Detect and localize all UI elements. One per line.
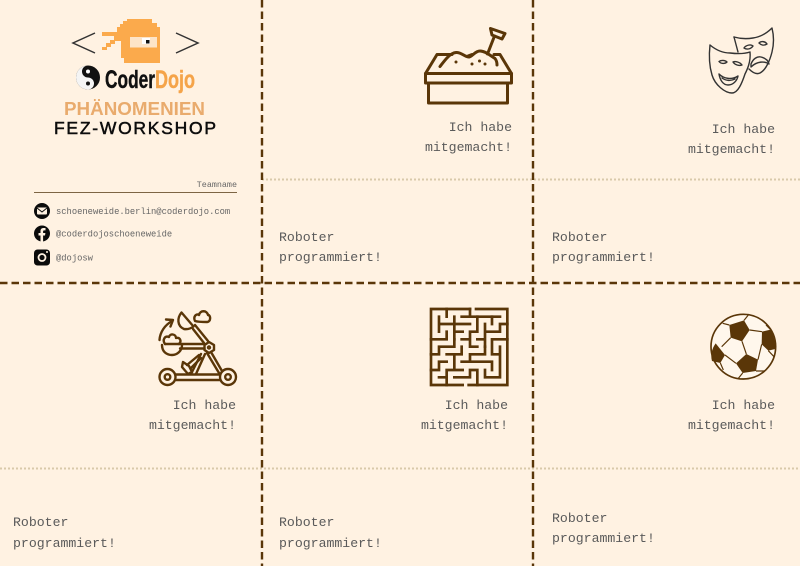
text: Ich habe mitgemacht, catapult — [149, 398, 236, 433]
text: Ich habe mitgemacht, sandbox: mitgemacht! — [425, 140, 512, 155]
contact: instagram — [34, 250, 94, 266]
heading: Phänomenien: PHÄNOMENIEN — [64, 99, 205, 119]
text: Roboter programmiert, row 1 column 2 — [279, 230, 382, 265]
text: Roboter programmiert, row 1 column 2: Roboter — [279, 230, 334, 245]
text: Roboter programmiert, row 2 column 2 — [279, 515, 382, 551]
text: Roboter programmiert, row 1 column 3 — [552, 230, 655, 265]
text: Ich habe mitgemacht, catapult: mitgemacht! — [149, 418, 236, 433]
icon: sandbox — [426, 28, 512, 103]
text: Roboter programmiert, row 1 column 2: programmiert! — [279, 250, 382, 265]
text: Ich habe mitgemacht, soccer ball: Ich habe — [712, 398, 775, 413]
text: Roboter programmiert, row 2 column 2: programmiert! — [279, 536, 382, 551]
icon: catapult — [160, 311, 236, 385]
text: Roboter programmiert, row 2 column 1 — [13, 515, 116, 551]
text: Ich habe mitgemacht, catapult: Ich habe — [173, 398, 236, 413]
text: Ich habe mitgemacht, sandbox — [425, 120, 512, 155]
text: Roboter programmiert, row 1 column 3: Roboter — [552, 230, 607, 245]
text: Ich habe mitgemacht, maze: mitgemacht! — [421, 418, 508, 433]
text: Ich habe mitgemacht, masks: mitgemacht! — [688, 142, 775, 157]
text: Roboter programmiert, row 1 column 3: programmiert! — [552, 250, 655, 265]
text: Ich habe mitgemacht, soccer ball — [688, 398, 775, 433]
text: Ich habe mitgemacht, maze — [421, 398, 508, 433]
text: Ich habe mitgemacht, maze: Ich habe — [445, 398, 508, 413]
text: Roboter programmiert, row 2 column 1: Roboter — [13, 515, 68, 530]
heading: FEZ-Workshop: FEZ-WORKSHOP — [54, 118, 216, 138]
logo: CoderDojo wordmark: Dojo — [155, 66, 195, 94]
logo: CoderDojo wordmark — [76, 66, 195, 94]
text: Roboter programmiert, row 2 column 3: programmiert! — [552, 531, 655, 546]
text: Roboter programmiert, row 2 column 2: Roboter — [279, 515, 334, 530]
icon: theatre masks — [709, 28, 774, 93]
text: Ich habe mitgemacht, sandbox: Ich habe — [449, 120, 512, 135]
contact: email — [34, 203, 230, 219]
team name field: Teamname — [197, 180, 237, 190]
text: Roboter programmiert, row 2 column 1: programmiert! — [13, 536, 116, 551]
contact: email: schoeneweide.berlin@coderdojo.com — [56, 207, 230, 217]
text: Roboter programmiert, row 2 column 3: Roboter — [552, 511, 607, 526]
contact: instagram: @dojosw — [56, 254, 94, 264]
contact: facebook: @coderdojoschoeneweide — [56, 230, 172, 240]
icon: maze — [431, 309, 507, 385]
icon: soccer ball — [711, 314, 776, 379]
contact: facebook — [34, 226, 172, 242]
logo: CoderDojo wordmark: Coder — [105, 66, 155, 94]
text: Ich habe mitgemacht, soccer ball: mitgemacht! — [688, 418, 775, 433]
text: Roboter programmiert, row 2 column 3 — [552, 511, 655, 546]
text: Ich habe mitgemacht, masks: Ich habe — [712, 122, 775, 137]
text: Ich habe mitgemacht, masks — [688, 122, 775, 157]
logo: pixel ninja with brackets — [73, 19, 198, 63]
